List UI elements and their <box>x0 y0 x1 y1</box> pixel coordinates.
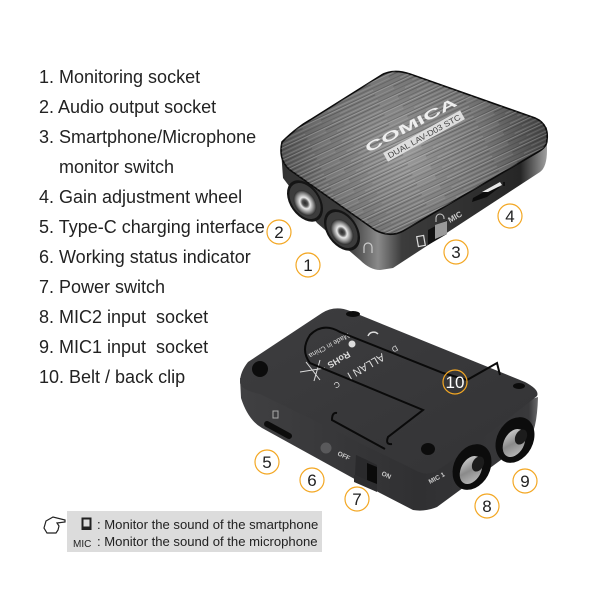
feature list: monitor switch <box>59 157 174 177</box>
callout 8: 8 <box>482 497 492 516</box>
callout 7: 7 <box>352 490 362 509</box>
monitor switch <box>417 209 464 247</box>
callout 2: 2 <box>274 223 284 242</box>
lower device top face <box>240 308 538 474</box>
callout 4: 4 <box>505 207 515 226</box>
monitor switch: MIC <box>446 209 464 225</box>
MIC1 socket <box>428 437 499 497</box>
callout 4 <box>498 204 522 228</box>
legend MIC label: MIC <box>73 539 91 550</box>
feature list: 8. MIC2 input socket <box>39 307 208 327</box>
MIC1 socket: MIC 1 <box>428 471 447 486</box>
feature list: 5. Type-C charging interface <box>39 217 265 237</box>
socket 2 <box>280 174 330 228</box>
belt clip <box>305 328 500 449</box>
rear markings: RoHS <box>326 349 352 370</box>
rear markings: Made in China <box>307 331 350 359</box>
headphone mark <box>364 243 372 253</box>
rear markings: C <box>332 379 342 390</box>
callout 1 <box>296 253 320 277</box>
callout 9 <box>513 469 537 493</box>
gain wheel <box>472 182 505 202</box>
Comica logo: COMICA <box>362 94 461 156</box>
callout 10 <box>443 370 467 394</box>
feature list: 4. Gain adjustment wheel <box>39 187 242 207</box>
rear markings: ALLAN I <box>345 350 386 381</box>
callout 5: 5 <box>262 453 272 472</box>
callout 3 <box>444 240 468 264</box>
feature list: 7. Power switch <box>39 277 165 297</box>
callout 10: 10 <box>446 373 464 392</box>
legend line 2: : Monitor the sound of the microphone <box>97 534 318 549</box>
callout 1: 1 <box>303 256 313 275</box>
feature list: 10. Belt / back clip <box>39 367 185 387</box>
callout 3: 3 <box>451 243 461 262</box>
legend panel <box>67 511 322 552</box>
power switch: ON <box>380 470 392 481</box>
power switch <box>336 450 392 492</box>
upper device: front view <box>280 71 547 270</box>
MIC2 socket <box>488 410 542 470</box>
callout 9: 9 <box>520 472 530 491</box>
feature list: 1. Monitoring socket <box>39 67 200 87</box>
lower device: rear view <box>240 308 542 511</box>
feature list: 6. Working status indicator <box>39 247 251 267</box>
feature list <box>39 67 265 387</box>
callout 5 <box>255 450 279 474</box>
icon: pointing hand <box>44 517 65 533</box>
upper device top face <box>281 71 547 234</box>
Type-C port <box>267 411 289 436</box>
legend line 1: : Monitor the sound of the smartphone <box>97 517 318 532</box>
status indicator <box>320 442 332 454</box>
callout 7 <box>345 487 369 511</box>
power switch: OFF <box>336 450 351 462</box>
screw holes <box>252 311 525 455</box>
upper device body <box>281 127 547 270</box>
rear markings <box>300 331 400 390</box>
feature list: 2. Audio output socket <box>39 97 216 117</box>
icon: smartphone <box>82 518 92 530</box>
brushed metal texture <box>281 71 547 234</box>
rear markings: D <box>390 343 400 354</box>
callout 8 <box>475 494 499 518</box>
socket 1 <box>317 203 367 257</box>
feature list: 9. MIC1 input socket <box>39 337 208 357</box>
feature list: 3. Smartphone/Microphone <box>39 127 256 147</box>
callout 6 <box>300 468 324 492</box>
model label: DUAL LAV-D03 STC <box>386 113 463 160</box>
lower device body <box>240 378 538 511</box>
callout 2 <box>267 220 291 244</box>
callout 6: 6 <box>307 471 317 490</box>
